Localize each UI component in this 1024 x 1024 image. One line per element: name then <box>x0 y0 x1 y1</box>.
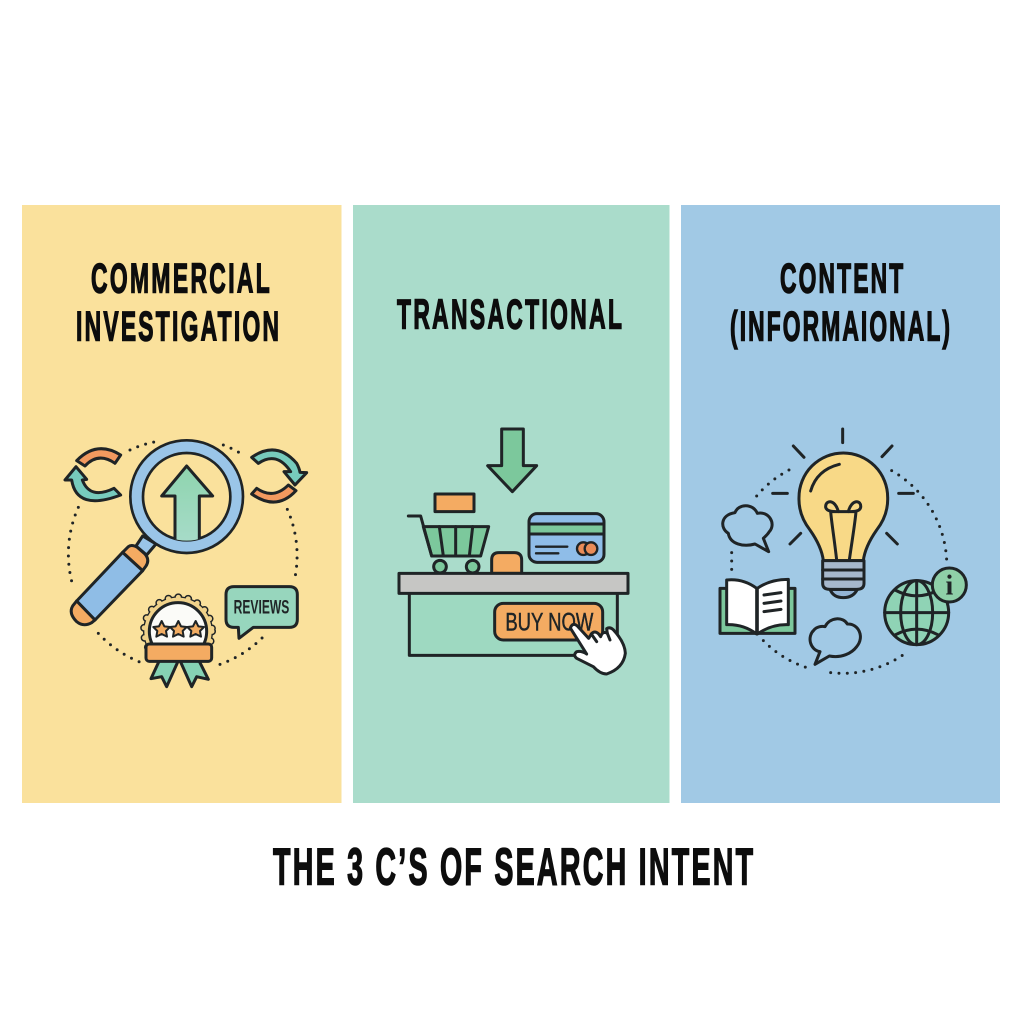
panel background: mint <box>353 205 670 803</box>
heading: content informational: (INFORMAIONAL) <box>730 305 950 350</box>
icon: globe <box>885 581 949 645</box>
magnifier neck <box>136 536 156 555</box>
book text lines <box>764 593 781 612</box>
icon: pointing hand <box>570 624 625 674</box>
icon: rating badge <box>143 596 213 687</box>
icon: right cycle arrows <box>252 450 307 502</box>
illustration: research cycle <box>65 441 307 687</box>
globe grid <box>885 581 949 645</box>
badge orange band <box>146 644 212 661</box>
panel: transactional <box>353 205 670 803</box>
icon: light rays <box>773 429 913 544</box>
globe sphere <box>885 581 949 645</box>
book cover <box>720 588 795 633</box>
cart wheels <box>434 560 479 573</box>
magnifier ring colour <box>137 447 237 547</box>
bulb highlight and filament <box>811 464 861 560</box>
heading: commercial investigation: COMMERCIAL <box>91 257 270 302</box>
button: buy now: BUY NOW <box>505 609 593 637</box>
icon: magnifying glass <box>71 447 237 625</box>
icon: shopping cart <box>408 516 489 573</box>
icon: open book <box>720 579 795 634</box>
callout: reviews bubble: REVIEWS <box>234 597 289 618</box>
icon: speech cloud lower <box>810 619 860 664</box>
magnifier lens ring <box>137 447 237 547</box>
icon: credit card <box>529 514 604 562</box>
panel background: blue <box>681 205 1000 803</box>
badge white dome <box>148 601 208 642</box>
cart handle and ribs <box>408 516 473 556</box>
panel background: yellow <box>22 205 342 803</box>
icon: down arrow <box>488 429 537 492</box>
card text lines <box>536 547 567 553</box>
illustration: checkout <box>399 429 628 674</box>
icon: speech cloud upper <box>723 506 772 552</box>
bulb bottom cap <box>830 589 857 598</box>
icon: left cycle arrows <box>65 449 121 501</box>
badge ribbon tails <box>151 661 208 687</box>
icon: info badge: i <box>945 571 953 602</box>
heading: transactional: TRANSACTIONAL <box>397 293 622 338</box>
globe meridian <box>901 581 933 645</box>
cart basket <box>423 527 489 556</box>
bulb base lines <box>823 570 864 579</box>
book pages <box>727 579 788 634</box>
magnifier handle <box>71 545 148 625</box>
product box floating <box>435 494 474 512</box>
heading: commercial investigation <box>76 257 279 350</box>
card chip circles <box>577 542 597 555</box>
up arrow inside the lens <box>162 466 213 547</box>
card body <box>529 514 604 562</box>
button: buy now <box>495 603 603 640</box>
badge scalloped seal <box>140 593 216 649</box>
illustration: knowledge <box>720 429 966 673</box>
card stripe <box>529 524 604 534</box>
heading: commercial investigation: INVESTIGATION <box>76 305 279 350</box>
heading: content informational: CONTENT <box>780 257 904 302</box>
small parcel on counter <box>492 553 522 573</box>
counter top <box>399 573 628 593</box>
title: THE 3 C’S OF SEARCH INTENT <box>273 837 753 896</box>
icon: info badge <box>932 568 966 602</box>
panel: content informational <box>681 205 1000 803</box>
panel: commercial investigation <box>22 205 342 803</box>
three stars <box>153 621 204 637</box>
callout: reviews bubble <box>226 587 297 638</box>
bulb screw base <box>823 561 864 589</box>
bulb glass <box>799 453 888 561</box>
counter body <box>409 592 617 655</box>
dotted circle <box>68 441 297 664</box>
icon: light bulb <box>799 453 888 598</box>
dotted circle <box>732 467 947 673</box>
heading: content informational <box>730 257 950 350</box>
